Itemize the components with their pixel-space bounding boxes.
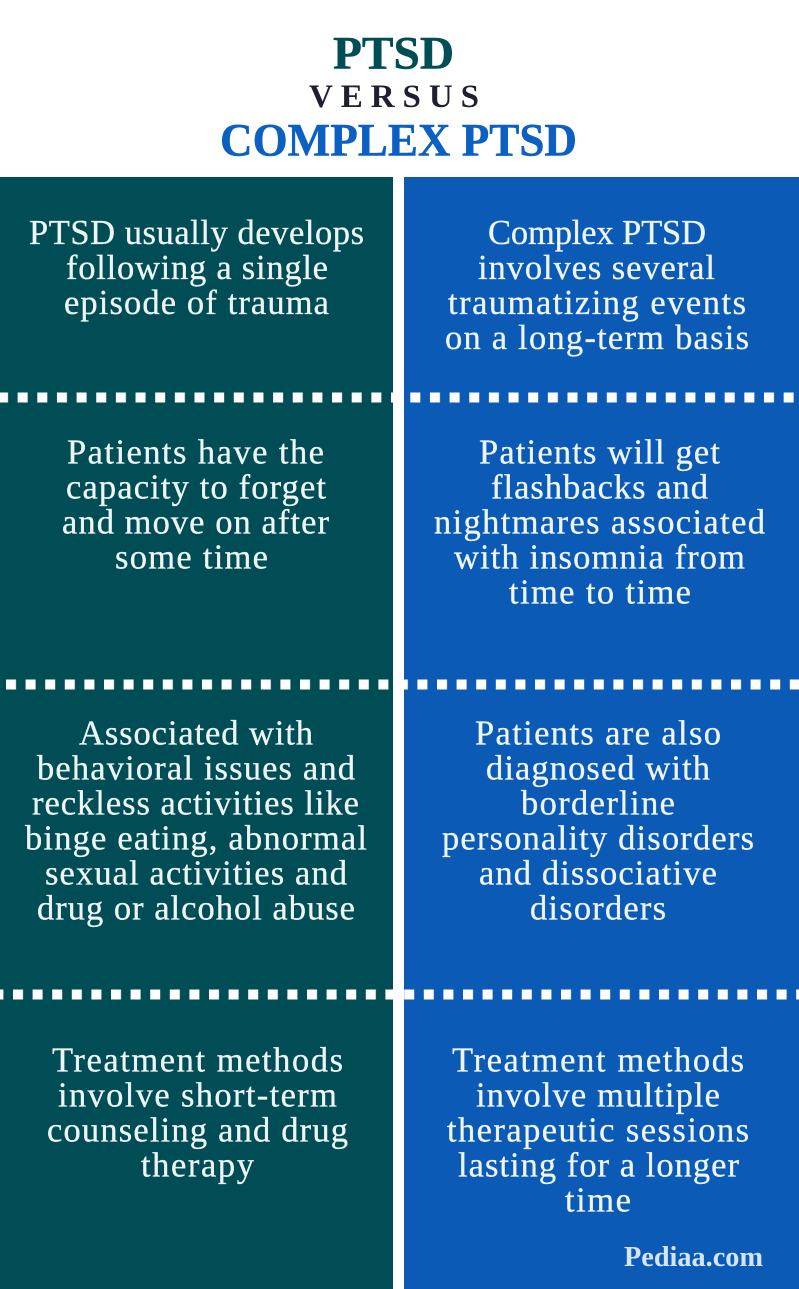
text: PTSD row 3: reckless activities like (32, 784, 359, 822)
text: Complex PTSD row 4: involve multiple (476, 1076, 720, 1114)
text: Complex PTSD row 2: nightmares associated (434, 504, 765, 542)
text: Complex PTSD row 4: therapeutic sessions (447, 1112, 749, 1150)
text: Complex PTSD row 2: with insomnia from (454, 538, 745, 576)
text: Complex PTSD row 4: lasting for a longer (458, 1146, 740, 1184)
text: PTSD row 1 (29, 214, 364, 322)
text: PTSD row 3: drug or alcohol abuse (37, 890, 355, 928)
text: PTSD row 2: some time (115, 538, 268, 576)
text: Complex PTSD row 2: time to time (509, 574, 691, 612)
heading: Complex PTSD: COMPLEX PTSD (220, 114, 577, 166)
text: PTSD row 2 (62, 434, 330, 576)
text: Complex PTSD row 3: and dissociative (479, 854, 717, 892)
text: Complex PTSD row 4: time (565, 1182, 631, 1220)
text: PTSD row 1: episode of trauma (64, 284, 329, 322)
text: PTSD row 4 (47, 1042, 348, 1184)
brand: Pediaa.com: Pediaa.com (624, 1242, 763, 1273)
text: PTSD row 3: behavioral issues and (37, 750, 355, 788)
text: Complex PTSD row 2: Patients will get (479, 434, 720, 472)
text: Complex PTSD row 1: Complex PTSD (488, 214, 706, 252)
text: Complex PTSD row 2: flashbacks and (491, 468, 708, 506)
text: Complex PTSD row 3: borderline (521, 784, 675, 822)
heading: PTSD: PTSD (333, 28, 454, 80)
text: Complex PTSD row 3: diagnosed with (486, 750, 710, 788)
text: PTSD row 2: and move on after (62, 504, 330, 542)
panel: Complex PTSD column (404, 177, 799, 1289)
text: Complex PTSD row 4: Treatment methods (452, 1042, 744, 1080)
text: Complex PTSD row 3: personality disorders (442, 820, 754, 858)
text: PTSD row 2: capacity to forget (66, 468, 326, 506)
text: Complex PTSD row 1 (445, 214, 749, 357)
text: PTSD row 1: following a single (66, 249, 328, 287)
text: Complex PTSD row 2 (434, 434, 765, 612)
text: PTSD row 1: PTSD usually develops (29, 214, 364, 252)
text: Complex PTSD row 1: involves several (478, 249, 715, 287)
text: Complex PTSD row 1: on a long-term basis (445, 319, 749, 357)
text: Complex PTSD row 3 (442, 714, 754, 928)
text: PTSD row 4: Treatment methods (52, 1042, 343, 1080)
heading: versus: VERSUS (309, 79, 479, 115)
text: PTSD row 3: binge eating, abnormal (25, 820, 367, 858)
title (220, 28, 577, 166)
text: PTSD row 4: therapy (141, 1146, 255, 1184)
text: PTSD row 3 (25, 714, 367, 928)
text: Complex PTSD row 4 (447, 1042, 749, 1220)
text: Complex PTSD row 3: disorders (530, 890, 666, 928)
text: Complex PTSD row 3: Patients are also (475, 714, 721, 752)
text: PTSD row 4: involve short-term (58, 1076, 337, 1114)
panel: PTSD column (0, 177, 393, 1289)
text: PTSD row 2: Patients have the (67, 434, 324, 472)
text: Complex PTSD row 1: traumatizing events (448, 284, 746, 322)
text: PTSD row 3: Associated with (79, 714, 313, 752)
text: PTSD row 3: sexual activities and (45, 854, 347, 892)
text: PTSD row 4: counseling and drug (47, 1112, 348, 1150)
